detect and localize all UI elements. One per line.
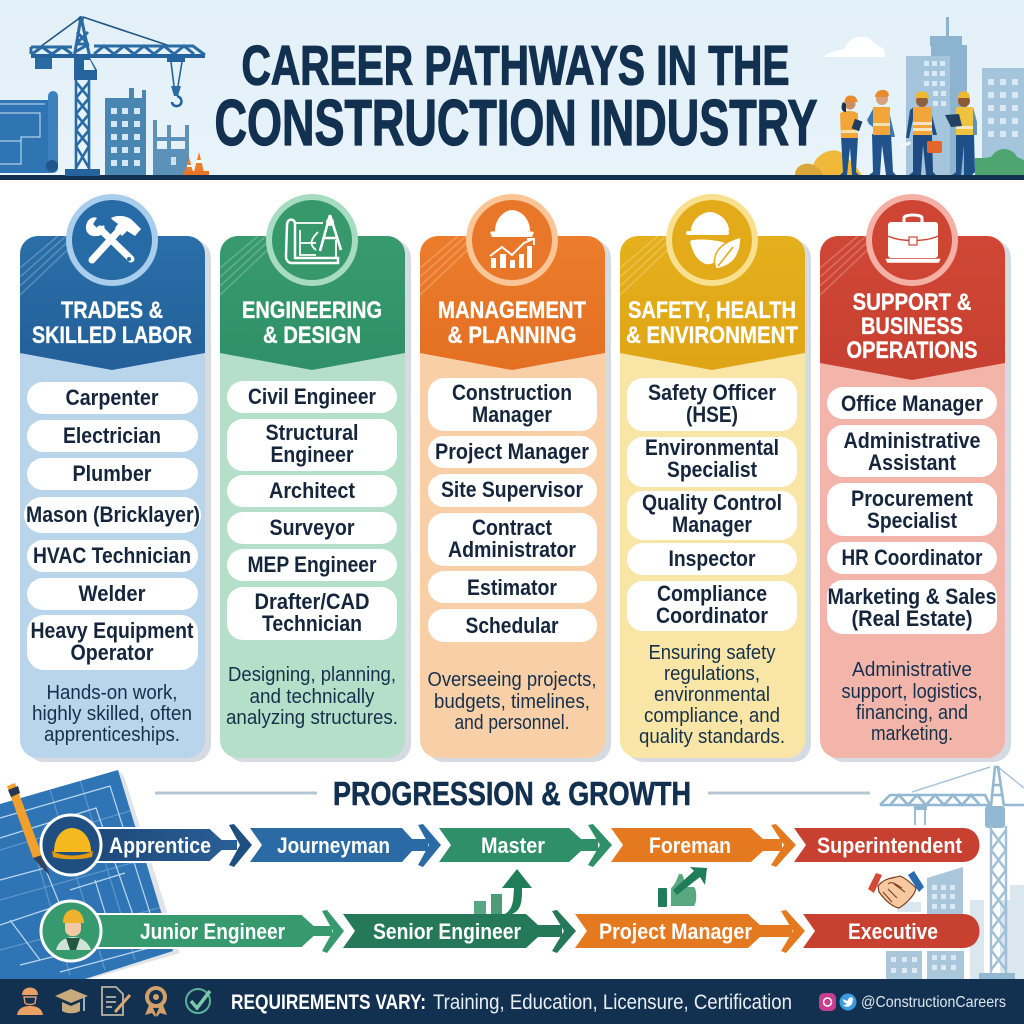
header banner bbox=[0, 0, 1024, 180]
panel: Management & Planning bbox=[420, 194, 611, 762]
job: Marketing & Sales (Real Estate) bbox=[827, 580, 997, 634]
job: Administrative Assistant bbox=[827, 425, 997, 477]
job: Environmental Specialist bbox=[627, 435, 797, 487]
description: analyzing structures. bbox=[226, 707, 398, 729]
icon: check circle bbox=[186, 989, 210, 1013]
job: Plumber: Plumber bbox=[72, 461, 152, 486]
section heading: progression and growth: PROGRESSION & GROWTH bbox=[333, 775, 691, 812]
heading bbox=[242, 297, 382, 349]
step: Senior Engineer bbox=[343, 910, 576, 953]
job: MEP Engineer bbox=[227, 549, 397, 581]
step: Superintendent: Superintendent bbox=[817, 833, 963, 858]
heading: ENGINEERING bbox=[242, 297, 382, 324]
step: Executive: Executive bbox=[848, 919, 938, 944]
icon: growth arrow with bars bbox=[474, 869, 532, 914]
description: Hands-on work, bbox=[46, 682, 178, 704]
description: and personnel. bbox=[454, 712, 570, 734]
illustration: cloud bbox=[824, 37, 885, 57]
job: Inspector bbox=[627, 543, 797, 575]
description: regulations, bbox=[664, 663, 760, 685]
job: Compliance Coordinator: Coordinator bbox=[656, 603, 768, 628]
job: Quality Control Manager: Manager bbox=[672, 512, 752, 537]
job: Drafter/CAD Technician bbox=[227, 587, 397, 640]
icon: briefcase on laptop bbox=[866, 194, 958, 286]
job: Site Supervisor: Site Supervisor bbox=[441, 477, 583, 502]
panel: Support & Business Operations bbox=[820, 194, 1011, 762]
job: Project Manager: Project Manager bbox=[435, 439, 589, 464]
description: Designing, planning, bbox=[228, 664, 396, 686]
worker 2 bbox=[867, 90, 896, 175]
job: MEP Engineer: MEP Engineer bbox=[248, 552, 377, 577]
heading bbox=[32, 297, 192, 349]
job: Safety Officer (HSE): Safety Officer bbox=[648, 380, 776, 405]
job: Marketing & Sales (Real Estate): Marketing & Sales bbox=[828, 584, 996, 609]
panel: Safety, Health & Environment bbox=[620, 194, 811, 762]
step: Junior Engineer bbox=[41, 901, 344, 961]
job: Construction Manager: Manager bbox=[472, 402, 552, 427]
illustration: team of workers bbox=[840, 90, 977, 175]
job: Quality Control Manager: Quality Control bbox=[642, 490, 782, 515]
job: HVAC Technician: HVAC Technician bbox=[33, 543, 191, 568]
icon: thumbs up with arrow bbox=[658, 867, 707, 907]
heading bbox=[438, 297, 586, 349]
job: Electrician bbox=[27, 420, 198, 452]
job: Administrative Assistant: Administrative bbox=[844, 428, 980, 453]
step: Master: Master bbox=[481, 833, 545, 858]
step: Master bbox=[439, 824, 612, 867]
illustration: blueprint sheet bbox=[0, 770, 180, 979]
icon: document with pen bbox=[102, 987, 130, 1015]
job: Electrician: Electrician bbox=[63, 423, 161, 448]
job: Mason: Mason (Bricklayer) bbox=[26, 502, 200, 527]
requirements text: REQUIREMENTS VARY: bbox=[231, 991, 426, 1014]
description: environmental bbox=[654, 684, 770, 706]
job: Estimator bbox=[428, 571, 597, 603]
job: Civil Engineer bbox=[227, 381, 397, 413]
step: Apprentice bbox=[41, 815, 252, 875]
job: Procurement Specialist bbox=[827, 483, 997, 536]
description bbox=[226, 664, 398, 729]
job: Welder bbox=[27, 578, 198, 610]
job: Quality Control Manager bbox=[627, 490, 797, 540]
job: Heavy Equipment Operator: Heavy Equipment bbox=[30, 618, 194, 643]
description: support, logistics, bbox=[842, 681, 982, 703]
step: Apprentice: Apprentice bbox=[109, 833, 211, 858]
job: Contract Administrator: Administrator bbox=[448, 537, 576, 562]
illustration: building under construction bbox=[153, 120, 189, 175]
description: apprenticeships. bbox=[44, 724, 180, 746]
description bbox=[32, 682, 192, 746]
heading: MANAGEMENT bbox=[438, 297, 586, 324]
job: Schedular: Schedular bbox=[466, 613, 559, 638]
illustration: bushes bbox=[795, 149, 1024, 175]
illustration: crane and buildings right bbox=[880, 767, 1024, 979]
description: and technically bbox=[250, 686, 374, 708]
heading: TRADES & bbox=[61, 297, 163, 324]
heading: & ENVIRONMENT bbox=[626, 322, 798, 349]
step: Foreman: Foreman bbox=[649, 833, 731, 858]
job: Architect bbox=[227, 475, 397, 507]
heading: & DESIGN bbox=[263, 322, 361, 349]
social handle: @ConstructionCareers bbox=[861, 994, 1006, 1011]
description bbox=[639, 642, 785, 748]
icon: hard hat, goggles and leaf bbox=[666, 194, 758, 286]
illustration: tower crane bbox=[31, 16, 205, 176]
job: Structural Engineer bbox=[227, 419, 397, 471]
title: CAREER PATHWAYS IN THE bbox=[242, 34, 790, 96]
heading: OPERATIONS bbox=[846, 337, 978, 364]
icon: blueprint and compass bbox=[266, 194, 358, 286]
heading bbox=[846, 289, 978, 364]
step: Journeyman bbox=[250, 824, 441, 867]
job: Carpenter bbox=[27, 382, 198, 414]
worker 1 bbox=[840, 96, 862, 175]
job: Estimator: Estimator bbox=[467, 575, 557, 600]
job: HR Coordinator: HR Coordinator bbox=[842, 545, 983, 570]
job: Drafter/CAD Technician: Technician bbox=[262, 611, 362, 636]
description: quality standards. bbox=[639, 726, 785, 748]
heading: SAFETY, HEALTH bbox=[628, 297, 796, 324]
icon: instagram bbox=[819, 993, 836, 1011]
job: Compliance Coordinator bbox=[627, 581, 797, 631]
job: Marketing & Sales (Real Estate): (Real Estate) bbox=[852, 606, 972, 631]
worker 4 bbox=[945, 91, 977, 175]
step: Project Manager bbox=[575, 910, 805, 953]
job: Mason bbox=[24, 497, 201, 533]
step: Superintendent bbox=[794, 828, 980, 862]
panel: Engineering & Design bbox=[220, 194, 411, 762]
job: Surveyor: Surveyor bbox=[270, 515, 355, 540]
job: Compliance Coordinator: Compliance bbox=[657, 581, 767, 606]
requirements text: Training, Education, Licensure, Certification bbox=[433, 991, 792, 1014]
arrow row: trades progression bbox=[41, 815, 980, 875]
description: budgets, timelines, bbox=[434, 691, 590, 713]
description: financing, and bbox=[856, 702, 968, 724]
job: Contract Administrator: Contract bbox=[472, 515, 553, 540]
job: Heavy Equipment Operator: Operator bbox=[70, 640, 154, 665]
requirements text bbox=[231, 991, 792, 1014]
job: Site Supervisor bbox=[428, 474, 597, 507]
job: Structural Engineer: Engineer bbox=[270, 442, 354, 467]
illustration: rolled blueprint bbox=[0, 91, 58, 173]
job: Construction Manager: Construction bbox=[452, 380, 572, 405]
illustration: city buildings right bbox=[906, 17, 1024, 175]
job: Administrative Assistant: Assistant bbox=[868, 450, 957, 475]
description bbox=[842, 659, 982, 745]
description: marketing. bbox=[871, 723, 953, 745]
job: Safety Officer (HSE): (HSE) bbox=[686, 402, 738, 427]
icon: handshake bbox=[868, 871, 924, 908]
footer bar bbox=[0, 979, 1024, 1024]
job: Plumber bbox=[27, 458, 198, 490]
job: Procurement Specialist: Procurement bbox=[851, 486, 974, 511]
icon: worker bbox=[17, 988, 43, 1015]
icon: hard hat and chart bbox=[466, 194, 558, 286]
step: Foreman bbox=[611, 824, 796, 867]
arrow row: engineering progression bbox=[41, 901, 980, 961]
job: Procurement Specialist: Specialist bbox=[867, 508, 958, 533]
description: compliance, and bbox=[644, 705, 780, 727]
job: Surveyor bbox=[227, 512, 397, 544]
job: Environmental Specialist: Environmental bbox=[645, 435, 779, 460]
heading bbox=[626, 297, 798, 349]
icon: pencil bbox=[7, 783, 50, 876]
description: Administrative bbox=[852, 659, 972, 681]
step: Project Manager: Project Manager bbox=[599, 919, 752, 944]
step: Journeyman: Journeyman bbox=[277, 833, 390, 858]
job: Safety Officer (HSE) bbox=[627, 378, 797, 431]
illustration: building left bbox=[105, 88, 146, 175]
panel: Trades & Skilled Labor bbox=[20, 194, 211, 762]
description: highly skilled, often bbox=[32, 703, 192, 725]
job: Office Manager: Office Manager bbox=[841, 391, 983, 416]
description: Overseeing projects, bbox=[428, 669, 596, 691]
job: Architect: Architect bbox=[269, 478, 356, 503]
description bbox=[428, 669, 596, 734]
heading: SKILLED LABOR bbox=[32, 322, 192, 349]
job: Contract Administrator bbox=[428, 513, 597, 566]
step: Executive bbox=[803, 914, 980, 948]
job: Structural Engineer: Structural bbox=[266, 420, 358, 445]
job: HR Coordinator bbox=[827, 542, 997, 574]
icon: award ribbon bbox=[145, 986, 167, 1017]
heading: & PLANNING bbox=[448, 322, 576, 349]
job: Heavy Equipment Operator bbox=[27, 615, 198, 670]
icon: graduation cap bbox=[55, 989, 88, 1013]
step: Senior Engineer: Senior Engineer bbox=[373, 919, 521, 944]
step: Junior Engineer: Junior Engineer bbox=[140, 919, 285, 944]
job: Schedular bbox=[428, 609, 597, 642]
job: Inspector: Inspector bbox=[668, 546, 756, 571]
job: Drafter/CAD Technician: Drafter/CAD bbox=[254, 589, 370, 614]
icon: traffic cones bbox=[183, 152, 209, 175]
job: Environmental Specialist: Specialist bbox=[667, 457, 758, 482]
job: Carpenter: Carpenter bbox=[66, 385, 159, 410]
worker 3 bbox=[898, 91, 942, 175]
section heading: progression and growth bbox=[155, 775, 870, 812]
title bbox=[214, 34, 818, 159]
icon: wrench and hammer bbox=[66, 194, 158, 286]
description: Ensuring safety bbox=[648, 642, 776, 664]
job: Welder: Welder bbox=[78, 581, 146, 606]
icon: twitter bird bbox=[840, 994, 856, 1010]
job: Civil Engineer: Civil Engineer bbox=[248, 384, 376, 409]
job: Construction Manager bbox=[428, 378, 597, 431]
heading: SUPPORT & bbox=[852, 289, 972, 316]
heading: BUSINESS bbox=[861, 313, 963, 340]
